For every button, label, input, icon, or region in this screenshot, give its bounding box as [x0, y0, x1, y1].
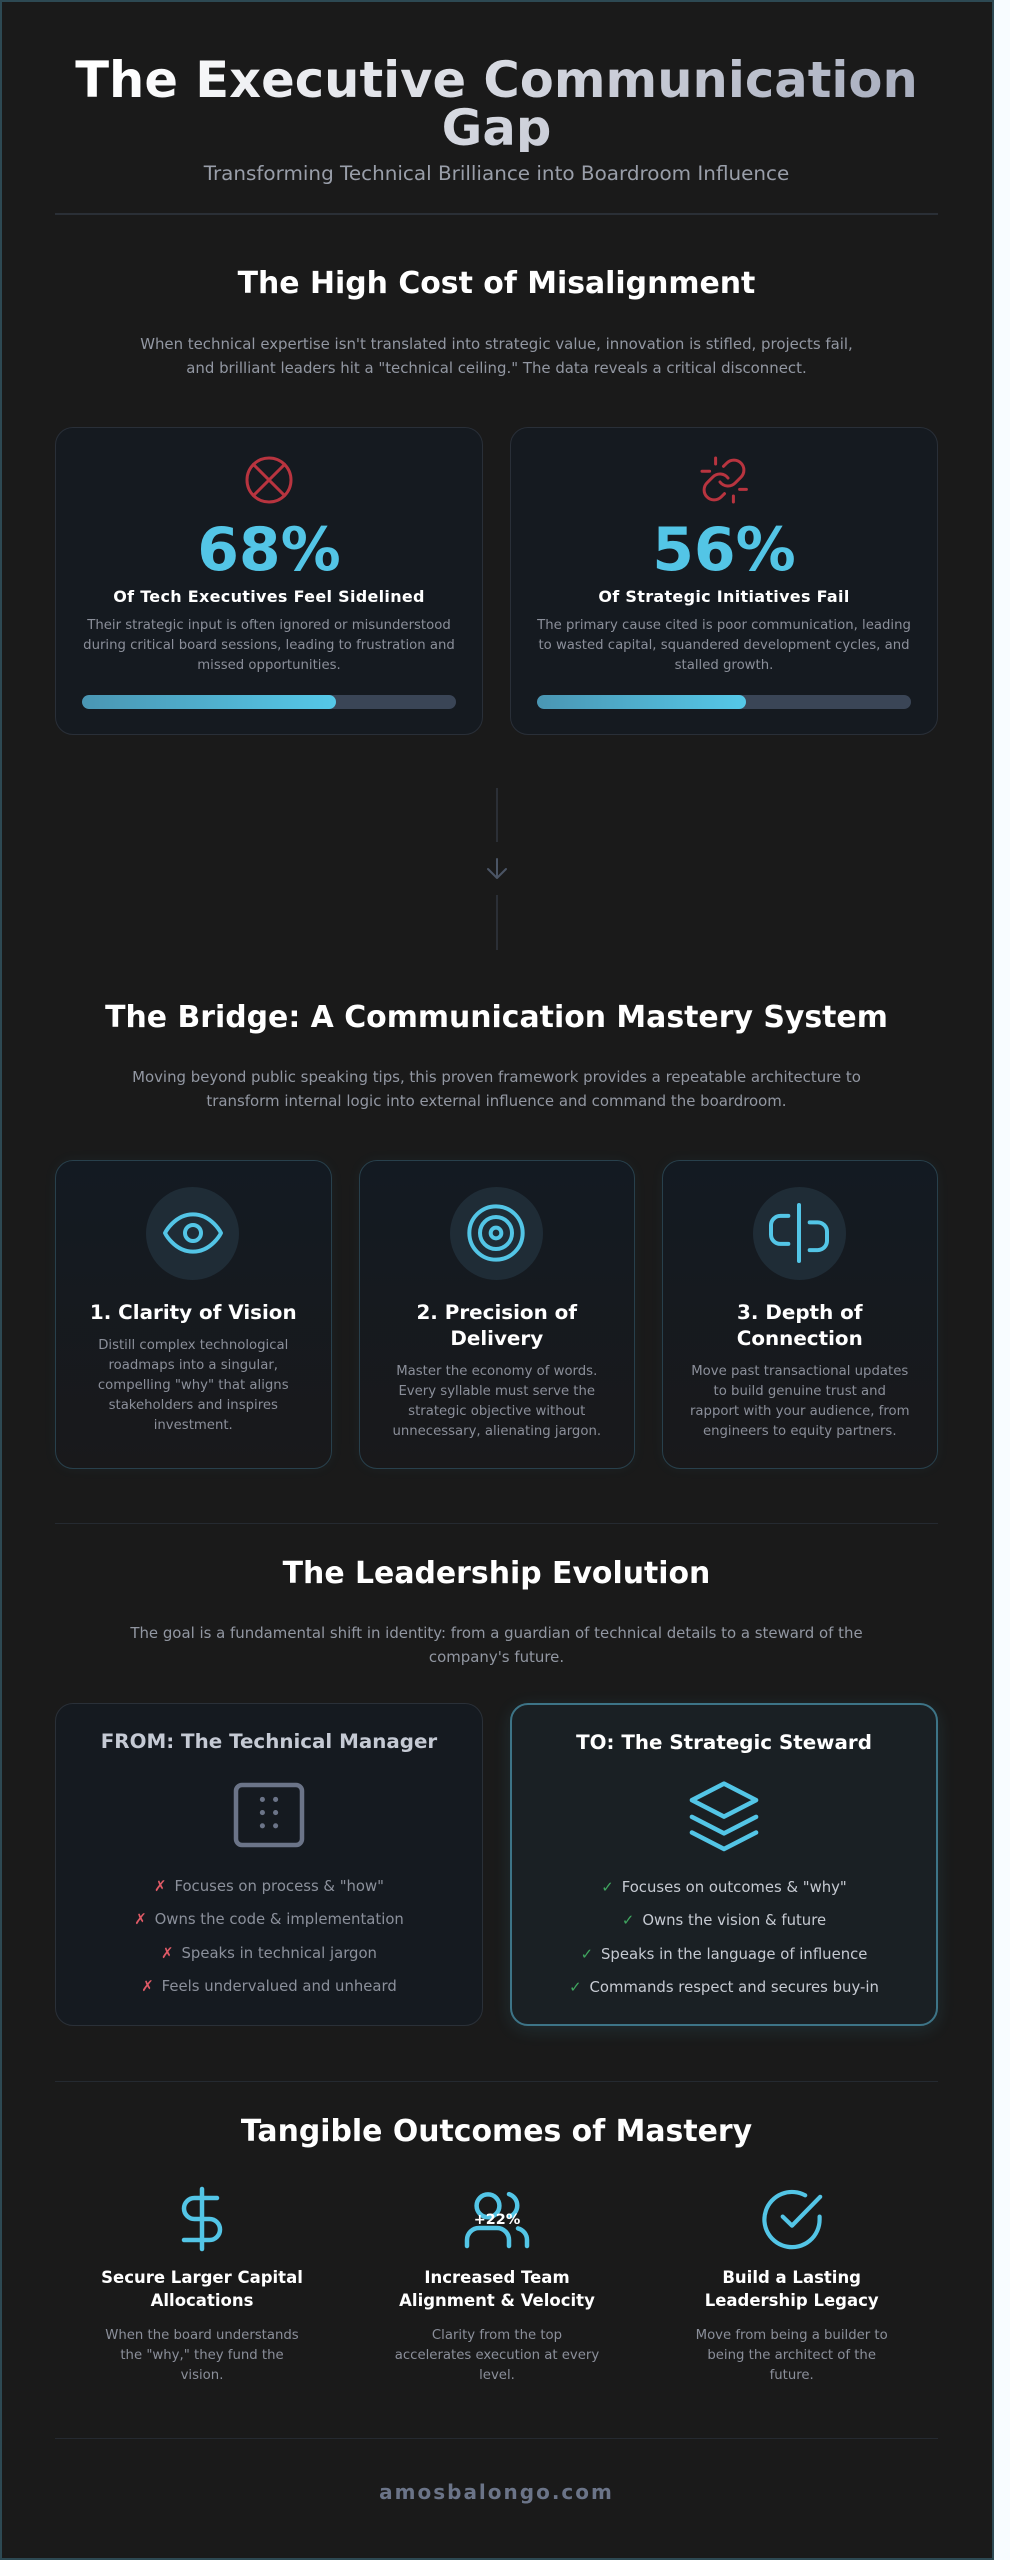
text: misalignment intro: When technical expertise isn't translated into strategic value, innovation is stifled, projects fail, [140, 335, 853, 353]
text: evolution intro: The goal is a fundamental shift in identity: from a guardian of technical details to a steward of the [130, 1624, 863, 1642]
outcome title: Leadership Legacy [705, 2291, 879, 2310]
card description: compelling "why" that aligns [98, 1378, 289, 1393]
card description: Distill complex technological [98, 1338, 288, 1353]
card description: to build genuine trust and [714, 1384, 886, 1399]
card title [737, 1301, 863, 1350]
text: bridge intro [132, 1068, 861, 1110]
icon: crossed circle [246, 456, 292, 504]
outcome description [105, 2328, 299, 2383]
card description [392, 1364, 601, 1439]
card description: engineers to equity partners. [703, 1424, 897, 1439]
icon: check circle [762, 2190, 822, 2250]
outcome description: level. [479, 2368, 515, 2383]
panel: depth of connection [662, 1160, 938, 1469]
outcome title [399, 2268, 595, 2310]
icon: target [450, 1186, 543, 1280]
outcome title: Secure Larger Capital [101, 2268, 303, 2287]
heading: tangible outcomes: Tangible Outcomes of Mastery [241, 2114, 752, 2149]
outcome description [696, 2328, 888, 2383]
stat label: Of Strategic Initiatives Fail [598, 587, 850, 606]
panel: team alignment outcome [395, 2192, 599, 2383]
title [55, 56, 938, 152]
panel: clarity of vision [55, 1160, 332, 1469]
heading: leadership evolution: The Leadership Evolution [283, 1556, 710, 1591]
list: manager traits: ✗ Owns the code & implementation [134, 1910, 404, 1928]
outcome description: the "why," they fund the [120, 2348, 284, 2363]
outcome title: Build a Lasting [722, 2268, 861, 2287]
card description: investment. [154, 1418, 233, 1433]
card title: 3. Depth of [737, 1301, 862, 1324]
icon: split connection [753, 1186, 846, 1280]
icon: users [464, 2192, 530, 2248]
text: bridge intro: transform internal logic into external influence and command the boardroom. [206, 1092, 787, 1110]
outcome description: Clarity from the top [432, 2328, 562, 2343]
text: evolution intro [130, 1624, 863, 1666]
panel: from technical manager [55, 1703, 483, 2026]
card description: strategic objective without [408, 1404, 585, 1419]
panel: precision of delivery [358, 1160, 635, 1469]
text: misalignment intro [140, 335, 853, 376]
arrow: connector down [487, 788, 507, 950]
card description: unnecessary, alienating jargon. [392, 1424, 601, 1439]
stat label: Of Tech Executives Feel Sidelined [113, 587, 425, 606]
subtitle: Transforming Technical Brilliance into Boardroom Influence [204, 161, 789, 185]
icon: grid box [234, 1782, 304, 1848]
heading: high cost of misalignment: The High Cost of Misalignment [238, 266, 755, 301]
stat description: missed opportunities. [197, 658, 341, 673]
card description: stakeholders and inspires [109, 1398, 278, 1413]
icon: dollar [182, 2186, 222, 2252]
outcome description [395, 2328, 599, 2383]
panel: 56% stat card [510, 427, 938, 735]
list: manager traits: ✗ Focuses on process & "how" [154, 1877, 384, 1895]
list: steward traits: ✓ Commands respect and secures buy-in [569, 1978, 879, 1996]
list: steward traits: ✓ Owns the vision & future [622, 1911, 826, 1929]
card title: 2. Precision of [416, 1301, 577, 1324]
stat description [537, 618, 911, 673]
panel title: FROM: The Technical Manager [101, 1730, 437, 1753]
panel title: TO: The Strategic Steward [576, 1731, 872, 1754]
list: manager traits: ✗ Speaks in technical jargon [161, 1944, 377, 1962]
card description: roadmaps into a singular, [108, 1358, 278, 1373]
panel: capital allocations outcome [101, 2186, 303, 2383]
list: steward traits [569, 1878, 879, 1996]
outcome description: future. [770, 2368, 814, 2383]
title: The Executive Communication [75, 51, 918, 109]
outcome title [101, 2268, 303, 2310]
stat description: Their strategic input is often ignored or misunderstood [87, 618, 451, 633]
text: misalignment intro: and brilliant leaders hit a "technical ceiling." The data reveals a critical disconnect. [186, 358, 807, 376]
panel: leadership legacy outcome [696, 2190, 888, 2383]
title: Gap [442, 99, 551, 157]
card title: 1. Clarity of Vision [90, 1301, 297, 1324]
icon: broken link [700, 456, 748, 504]
panel: 68% stat card [55, 427, 483, 735]
icon: eye [146, 1186, 239, 1280]
footer: site name: amosbalongo.com [379, 2480, 614, 2504]
stat description: during critical board sessions, leading to frustration and [83, 638, 455, 653]
text: evolution intro: company's future. [429, 1648, 564, 1666]
icon: layers [690, 1781, 758, 1852]
list: manager traits: ✗ Feels undervalued and unheard [141, 1977, 397, 1995]
outcome description: being the architect of the [707, 2348, 876, 2363]
outcome description: When the board understands [105, 2328, 299, 2343]
card title [416, 1301, 578, 1350]
stat description: stalled growth. [675, 658, 773, 673]
list: manager traits [134, 1877, 404, 1995]
stat description: to wasted capital, squandered development cycles, and [538, 638, 910, 653]
outcome description: vision. [181, 2368, 223, 2383]
outcome title: Allocations [151, 2291, 253, 2310]
card description [690, 1364, 910, 1439]
progress bar 56% [537, 695, 911, 709]
outcome title: Alignment & Velocity [399, 2291, 595, 2310]
card title: Connection [737, 1327, 863, 1350]
outcome description: accelerates execution at every [395, 2348, 599, 2363]
progress bar 68% [82, 695, 456, 709]
list: steward traits: ✓ Focuses on outcomes & "why" [601, 1878, 847, 1896]
outcome title: Increased Team [424, 2268, 570, 2287]
stat number: 68% [197, 515, 341, 585]
panel: to strategic steward [510, 1703, 938, 2026]
stat number: 56% [652, 515, 796, 585]
card description: Every syllable must serve the [398, 1384, 595, 1399]
heading: the bridge: The Bridge: A Communication Mastery System [105, 1000, 888, 1035]
card description: Master the economy of words. [396, 1364, 597, 1379]
outcome description: Move from being a builder to [696, 2328, 888, 2343]
list: steward traits: ✓ Speaks in the language of influence [581, 1945, 867, 1963]
card description: Move past transactional updates [691, 1364, 908, 1379]
stat description [83, 618, 455, 673]
text: bridge intro: Moving beyond public speaking tips, this proven framework provides a repeatable architecture to [132, 1068, 861, 1086]
outcome title [705, 2268, 879, 2310]
stat: +22%: +22% [474, 2212, 520, 2228]
card description [98, 1338, 289, 1433]
card title: Delivery [450, 1327, 543, 1350]
stat description: The primary cause cited is poor communication, leading [537, 618, 911, 633]
card description: rapport with your audience, from [690, 1404, 910, 1419]
